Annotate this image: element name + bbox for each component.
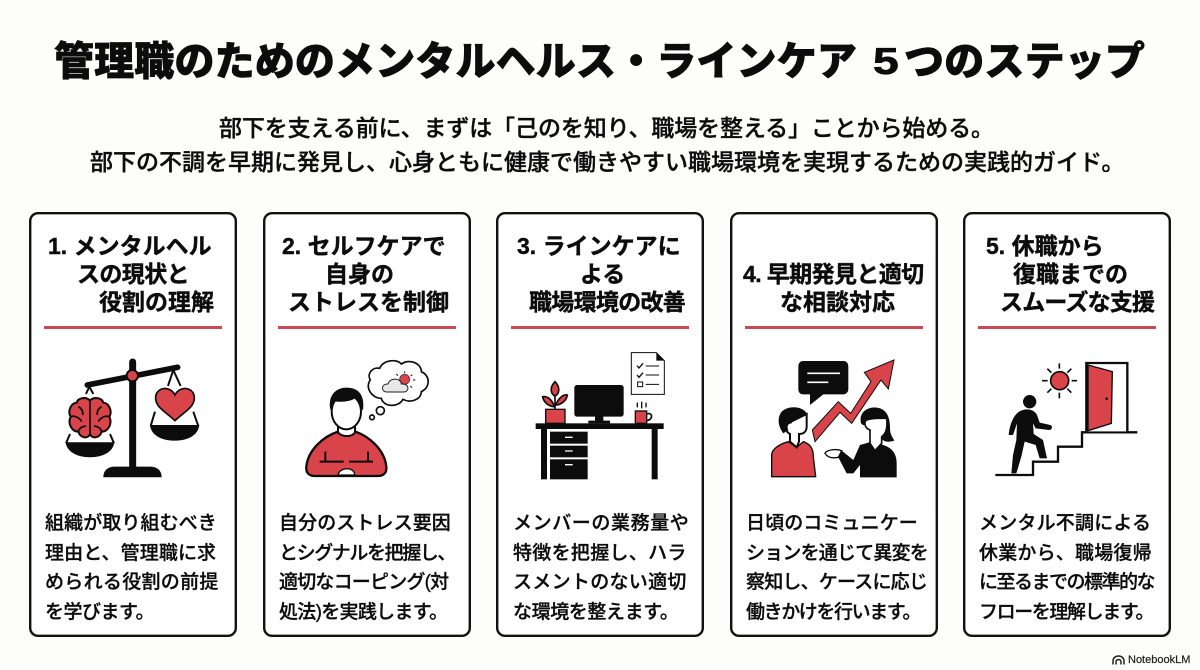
icon: person with thought cloud — [305, 360, 430, 478]
heading: step 4: な相談対応 — [780, 289, 895, 315]
body text: step 4: 働きかけを行います。 — [746, 602, 920, 623]
body text: step 1: 組織が取り組むべき — [45, 513, 217, 534]
body text: step 5: フローを理解します。 — [979, 602, 1153, 623]
icon: office desk with monitor and plant — [536, 352, 665, 480]
body text: step 5: メンタル不調による — [979, 513, 1151, 534]
heading: step 2: 自身の — [325, 261, 394, 287]
body text: step 1: められる役割の前提 — [45, 572, 219, 593]
body text: step 5: 休業から、職場復帰 — [979, 543, 1152, 564]
title: 5 — [873, 41, 899, 82]
panel: step 2 — [263, 212, 471, 637]
panel: step 3 — [496, 212, 704, 637]
heading: step 5 — [986, 233, 1155, 315]
icon: person climbing stairs to open door — [995, 362, 1138, 476]
heading: step 1: 役割の理解 — [99, 289, 214, 315]
heading: step 3: よる — [580, 261, 625, 287]
body text: step 5 — [979, 513, 1154, 623]
body text: step 5: に至るまでの標準的な — [979, 572, 1154, 593]
heading: step 1: 1. メンタルヘル — [48, 233, 212, 259]
heading: step 2: ストレスを制御 — [288, 289, 449, 315]
title: 管理職のためのメンタルヘルス・ラインケア — [54, 40, 857, 84]
body text: step 2: 処法)を実践します。 — [279, 602, 447, 623]
body text: step 4: 日頃のコミュニケー — [746, 513, 918, 534]
body text: step 1: 理由と、管理職に求 — [45, 543, 216, 564]
panel: step 4 — [730, 212, 938, 637]
body text: step 3: な環境を整えます。 — [513, 602, 679, 623]
heading: step 5: スムーズな支援 — [1000, 289, 1154, 315]
heading: step 1 — [48, 233, 214, 315]
body text: step 3: スメントのない適切 — [513, 572, 687, 593]
body text: step 2: とシグナルを把握し、 — [279, 543, 455, 564]
icon: conversation with rising arrow — [771, 359, 897, 478]
logo: NotebookLM: NotebookLM — [1128, 654, 1190, 666]
body text: step 2: 適切なコーピング(対 — [279, 572, 448, 593]
heading: step 3: 3. ラインケアに — [517, 233, 681, 259]
panel: step 5 — [963, 212, 1171, 637]
heading: step 4: 4. 早期発見と適切 — [743, 261, 924, 287]
heading: step 4 — [743, 261, 924, 315]
heading: step 2 — [282, 233, 449, 315]
body text: step 4 — [746, 513, 928, 623]
subtitle: 部下を支える前に、まずは「己のを知り、職場を整える」ことから始める。 — [219, 115, 994, 141]
body text: step 2 — [279, 512, 455, 623]
body text: step 3: 特徴を把握し、ハラ — [513, 543, 687, 564]
subtitle — [90, 115, 1125, 175]
title: つのステップ — [904, 40, 1145, 84]
body text: step 1: を学びます。 — [45, 602, 154, 623]
body text: step 4: ションを通じて異変を — [746, 543, 928, 564]
panel: step 1 — [29, 212, 237, 637]
heading: step 2: 2. セルフケアで — [282, 233, 446, 259]
heading: step 3: 職場環境の改善 — [529, 289, 685, 315]
body text: step 3: メンバーの業務量や — [513, 513, 689, 534]
body text: step 3 — [513, 512, 689, 623]
body text: step 4: 察知し、ケースに応じ — [746, 572, 927, 593]
subtitle: 部下の不調を早期に発見し、心身ともに健康で働きやすい職場環境を実現するための実践的ガイド。 — [90, 149, 1125, 175]
heading: step 3 — [517, 233, 685, 315]
heading: step 5: 復職までの — [1013, 261, 1128, 287]
body text: step 2: 自分のストレス要因 — [279, 513, 451, 534]
heading: step 1: スの現状と — [77, 261, 189, 287]
body text: step 1 — [45, 512, 219, 623]
heading: step 5: 5. 休職から — [986, 233, 1104, 259]
icon: scales with brain and heart — [65, 358, 200, 478]
